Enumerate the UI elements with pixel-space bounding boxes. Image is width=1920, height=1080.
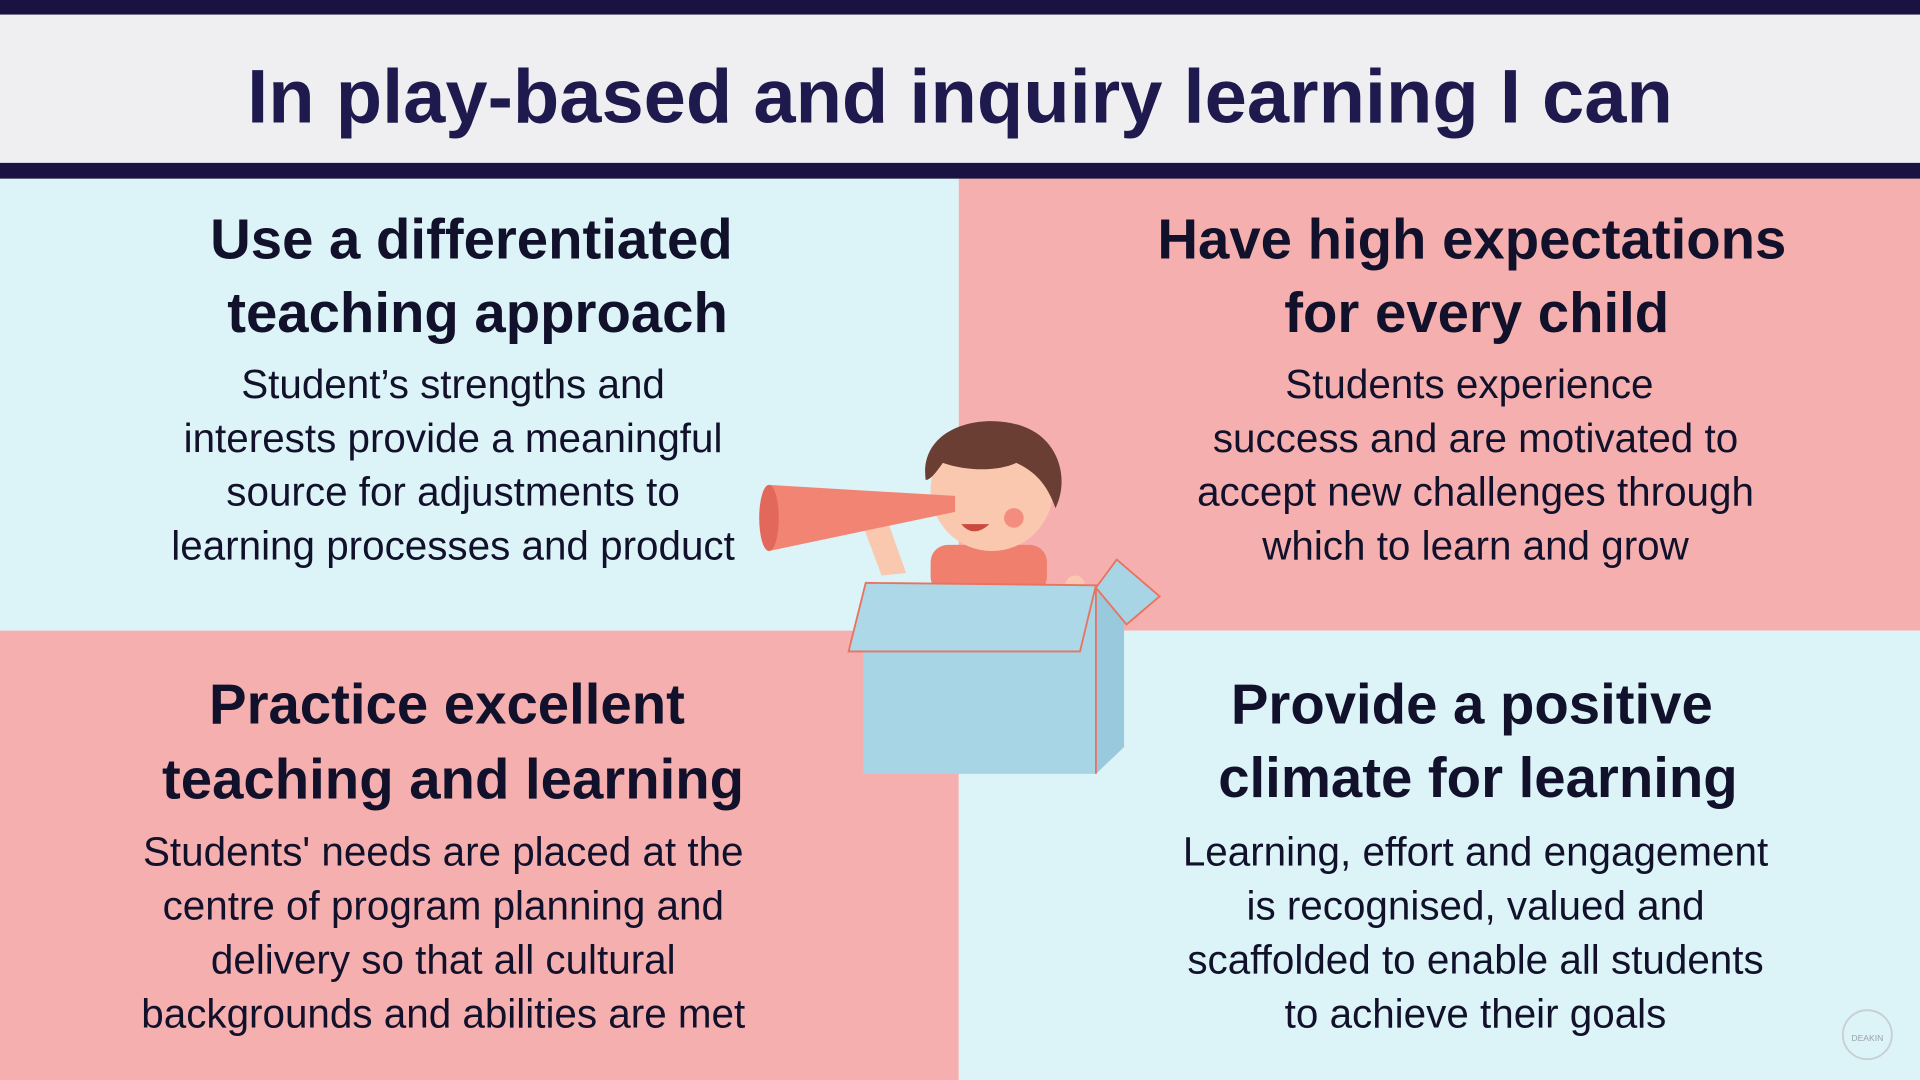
panel: high expectations [959,179,1920,631]
body: differentiated: source for adjustments to [226,469,680,515]
body: excellent teaching: centre of program planning and [163,883,724,929]
body: excellent teaching: Students' needs are placed at the [143,829,744,875]
body: high expectations: Students experience [1285,361,1654,407]
body: positive climate: is recognised, valued and [1246,883,1705,929]
body: positive climate: to achieve their goals [1285,990,1666,1036]
body: differentiated: Student’s strengths and [241,361,665,407]
body: positive climate: scaffolded to enable all students [1187,936,1764,982]
panel: differentiated teaching [0,179,959,631]
body: excellent teaching: backgrounds and abilities are met [141,990,745,1036]
header band [0,0,1920,179]
body: positive climate: Learning, effort and engagement [1183,829,1768,875]
body: high expectations: which to learn and grow [1261,523,1690,569]
title: In play-based and inquiry learning I can [247,54,1673,139]
heading: positive climate: climate for learning [1218,746,1738,809]
logo: Deakin University [1843,1010,1892,1059]
body: differentiated: learning processes and product [171,523,735,569]
body: excellent teaching: delivery so that all cultural [211,936,676,982]
body: high expectations: success and are motivated to [1213,415,1738,461]
panel: excellent teaching [0,631,959,1080]
heading: positive climate: Provide a positive [1231,673,1713,736]
heading: differentiated: teaching approach [227,281,728,344]
heading: excellent teaching: Practice excellent [209,673,685,736]
heading: excellent teaching: teaching and learning [162,747,744,810]
heading: high expectations: for every child [1284,281,1669,344]
panel: positive climate [959,631,1920,1080]
body: high expectations: accept new challenges through [1197,469,1754,515]
heading: high expectations: Have high expectations [1157,207,1786,270]
logo: Deakin University: DEAKIN [1851,1033,1883,1043]
heading: differentiated: Use a differentiated [210,207,733,270]
body: differentiated: interests provide a meaningful [184,415,722,461]
illustration: child in box with telescope [759,421,1160,774]
